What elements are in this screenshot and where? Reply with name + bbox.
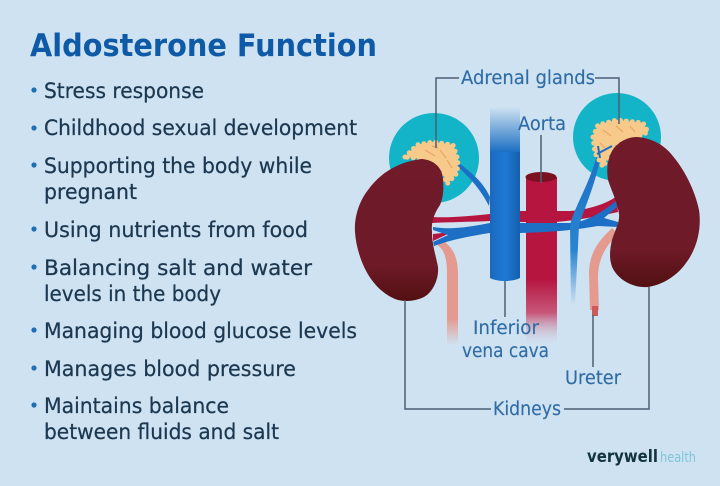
bullet list	[31, 79, 357, 444]
logo: verywell health: health	[660, 450, 696, 466]
bullet: blood pressure: Manages blood pressure	[44, 357, 296, 381]
label: kidneys: Kidneys	[493, 399, 561, 420]
kidney diagram	[355, 68, 700, 420]
icon: right highlight circle	[573, 93, 661, 181]
bullet: supporting the body: pregnant	[44, 180, 137, 204]
aorta	[432, 172, 618, 347]
icon: left kidney	[355, 159, 443, 301]
icon: right adrenal gland	[593, 120, 648, 167]
logo: verywell health: verywell	[587, 447, 658, 466]
ureters	[434, 228, 618, 345]
small vein over right adrenal	[597, 146, 612, 158]
label: adrenal glands: Adrenal glands	[461, 68, 595, 89]
bullet: fluids and salt	[31, 394, 279, 444]
bullet: childhood sexual development: Childhood sexual development	[44, 116, 357, 140]
label: inferior vena cava	[462, 318, 549, 362]
title: Aldosterone Function	[30, 28, 377, 64]
bullet: balancing salt and water: levels in the body	[44, 282, 221, 306]
label: inferior vena cava: Inferior	[473, 318, 539, 339]
icon: left adrenal gland	[405, 142, 458, 184]
bullet: blood glucose: Managing blood glucose levels	[44, 319, 357, 343]
label: inferior vena cava: vena cava	[462, 341, 549, 362]
bullet: balancing salt and water: Balancing salt and water	[44, 256, 312, 280]
label: ureter: Ureter	[565, 368, 621, 389]
bullet: fluids and salt: between fluids and salt	[44, 420, 279, 444]
icon: right kidney	[607, 137, 700, 287]
bullet: using nutrients: Using nutrients from food	[44, 218, 308, 242]
bullet: stress response: Stress response	[44, 79, 204, 103]
inferior vena cava	[433, 107, 618, 305]
leader lines	[436, 78, 459, 148]
icon: left highlight circle	[389, 113, 479, 203]
bullet: balancing salt and water	[31, 256, 312, 306]
bullet: fluids and salt: Maintains balance	[44, 394, 229, 418]
bullet: supporting the body	[31, 154, 312, 204]
label: aorta: Aorta	[518, 114, 566, 135]
bullet: supporting the body: Supporting the body while	[44, 154, 312, 178]
